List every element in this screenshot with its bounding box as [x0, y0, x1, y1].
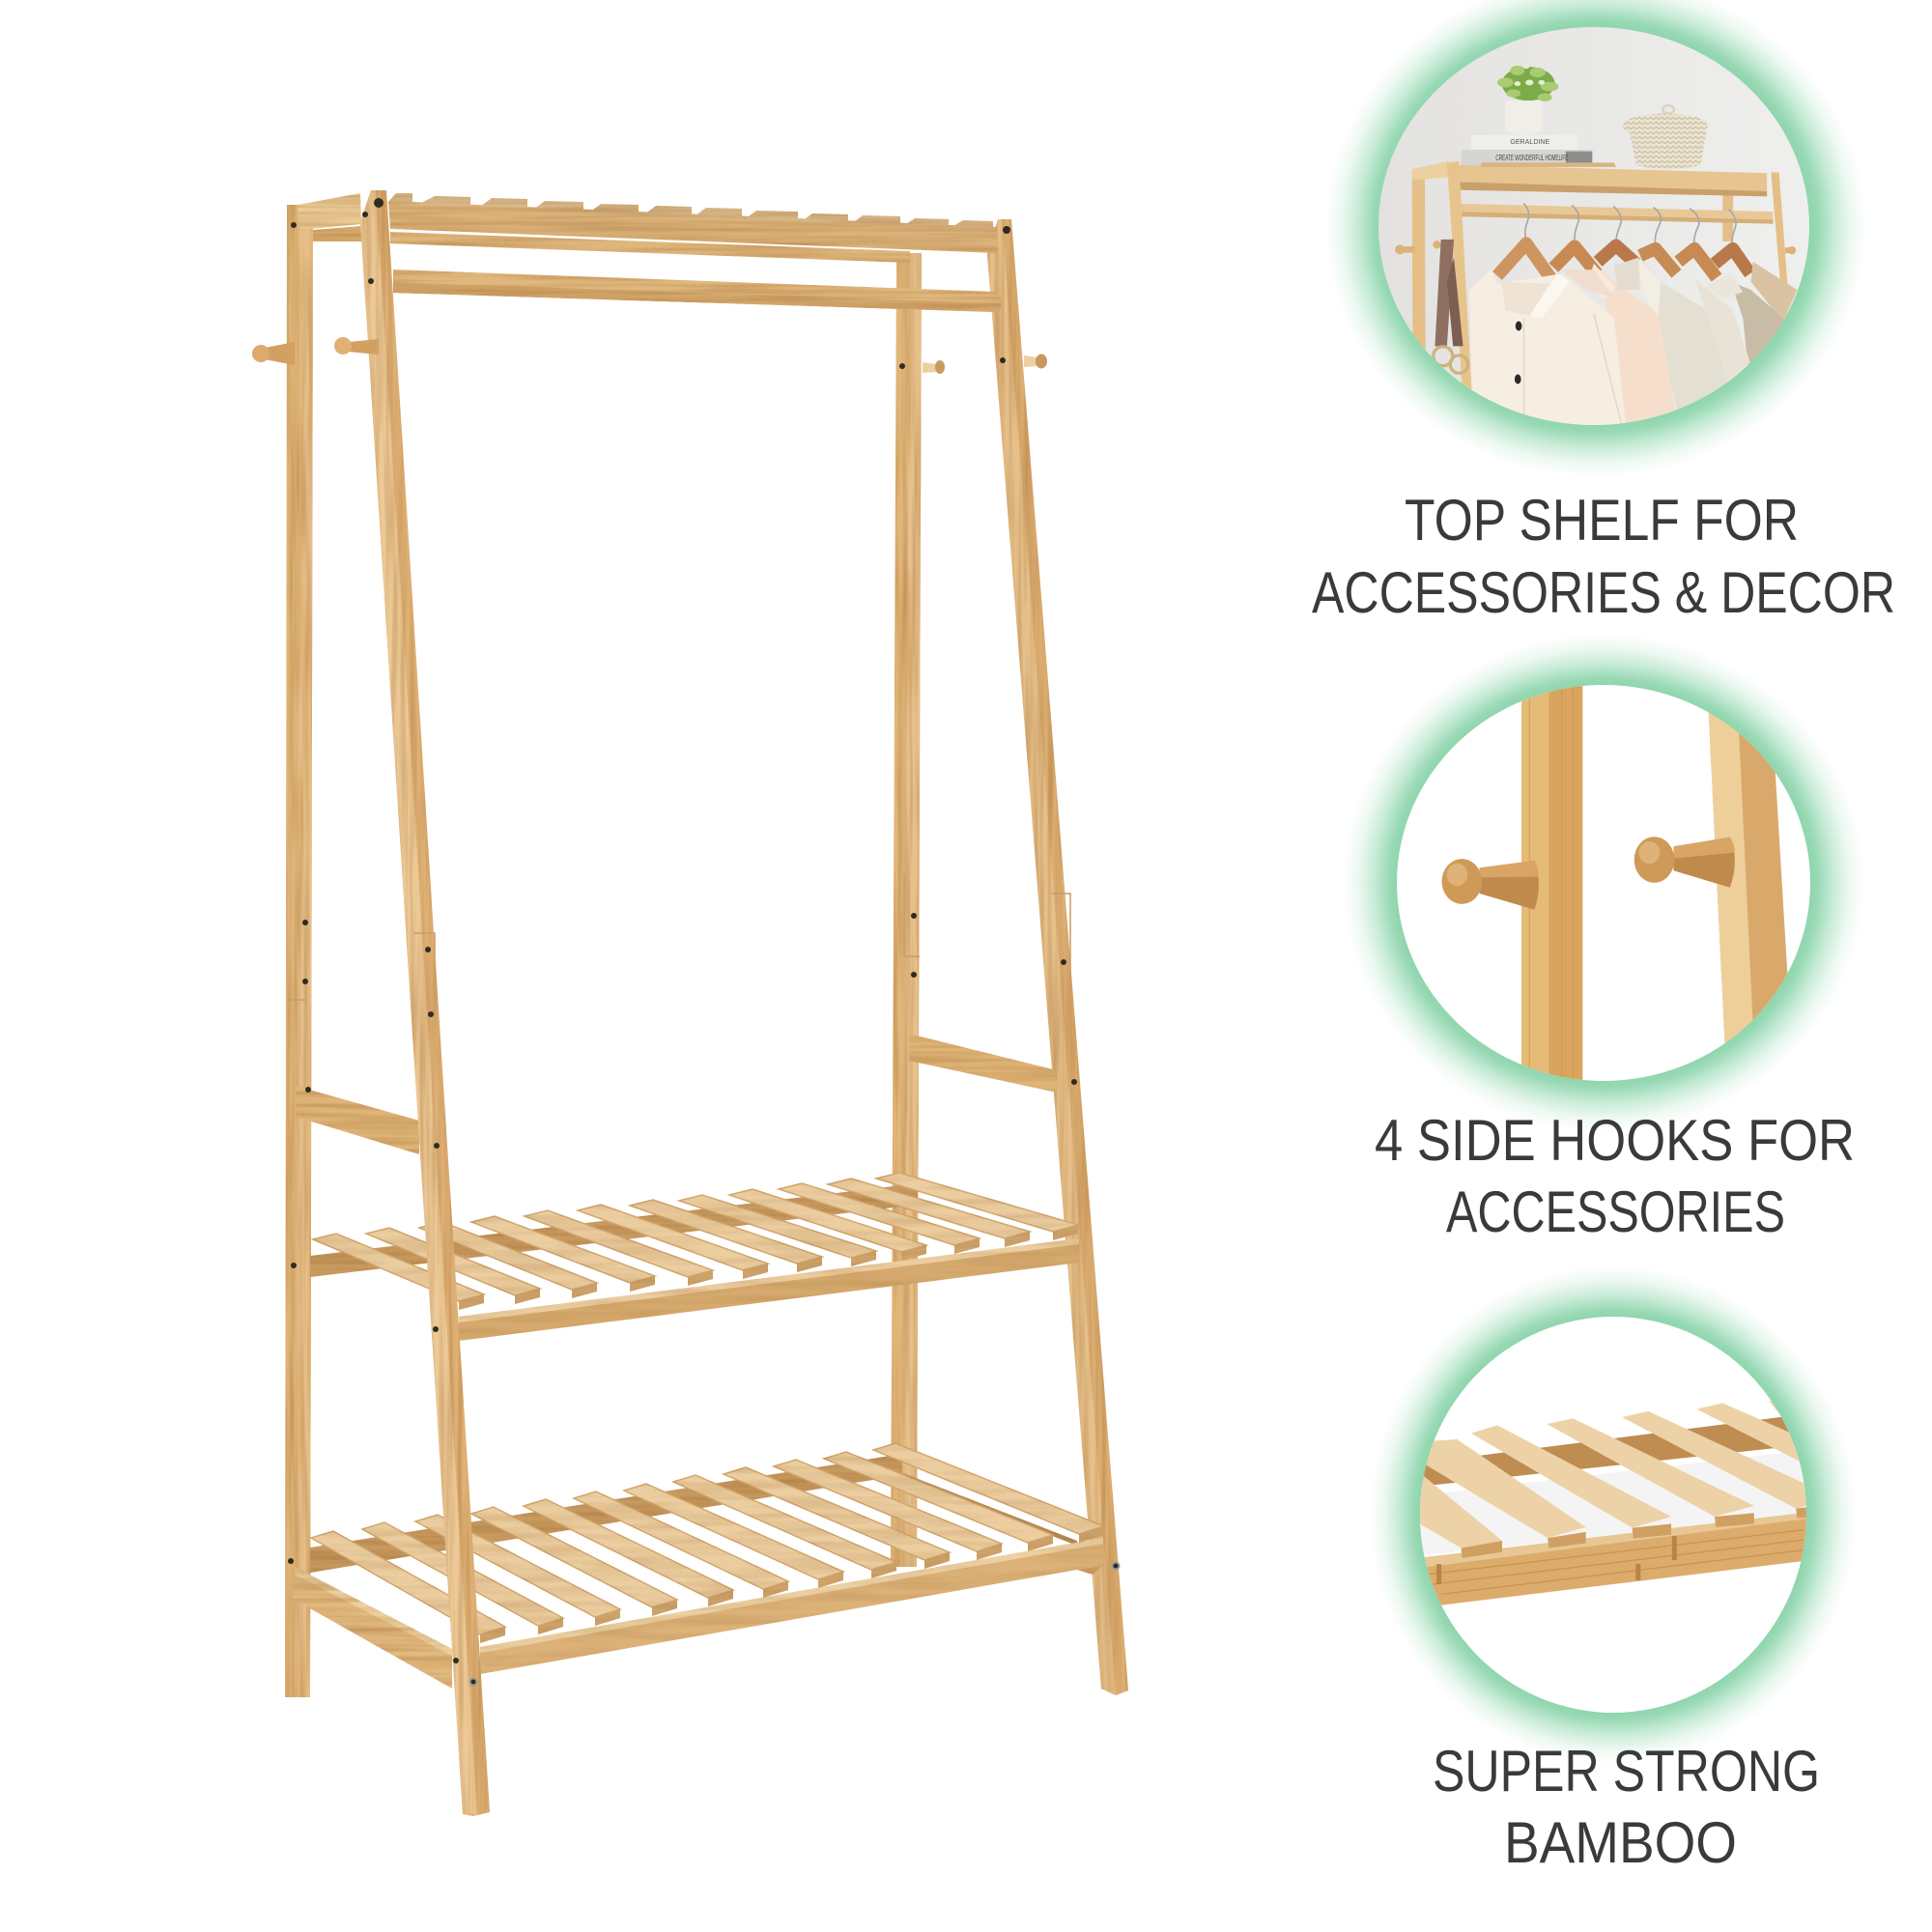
rear rail close up [1422, 1416, 1795, 1486]
green glow 3 [1370, 1265, 1857, 1764]
caption 3 [1433, 1739, 1820, 1875]
shelf in photo [1412, 161, 1767, 196]
bamboo garment rack product [252, 190, 1128, 1816]
caption 3: SUPER STRONG [1433, 1739, 1820, 1804]
feature: side hooks [1343, 634, 1864, 1244]
rear frame in photo [1412, 169, 1787, 350]
books [1462, 135, 1592, 166]
middle shelf front rail [459, 1238, 1079, 1341]
hook: front left [334, 337, 379, 355]
side pegs in photo [1395, 241, 1796, 254]
left post with hook [1442, 671, 1582, 1090]
photo circle: shelf with clothes [1372, 19, 1816, 435]
green glow 2 [1343, 634, 1864, 1132]
bottom shelf slat tops [311, 1443, 1104, 1634]
caption 2: 4 SIDE HOOKS FOR [1375, 1108, 1855, 1173]
caption 2 [1375, 1108, 1855, 1244]
green glow 1 [1325, 0, 1866, 477]
hook: rear right [923, 360, 945, 374]
feature: top shelf [1312, 0, 1895, 625]
hook: rear left [252, 342, 295, 365]
photo circle: slats close up [1420, 1317, 1806, 1713]
hangers [1497, 243, 1750, 278]
side braces and shelf rear rails [293, 1034, 1103, 1689]
slats close up [1420, 1401, 1806, 1548]
middle shelf [313, 1173, 1079, 1341]
screws [288, 198, 1119, 1685]
right post with hook [1634, 713, 1787, 1043]
side hooks [252, 337, 1047, 374]
right front leg [987, 219, 1128, 1695]
middle shelf slat tops [313, 1173, 1078, 1301]
leg splice joints [287, 874, 1070, 1014]
top shelf slat ends [388, 193, 993, 227]
bottom shelf [311, 1443, 1104, 1674]
feature: strong bamboo [1376, 1271, 1851, 1862]
top shelf [298, 193, 998, 263]
caption 2: ACCESSORIES [1446, 1179, 1785, 1244]
front post in photo [1447, 161, 1472, 403]
hook: front right [1024, 354, 1047, 369]
books: GERALDINE [1510, 138, 1550, 146]
middle shelf slat ends [459, 1225, 1078, 1310]
hanging rod [393, 270, 1002, 312]
rod and hanger hooks [1462, 203, 1773, 245]
shelf floor [1417, 1449, 1811, 1556]
rear frame posts [285, 205, 922, 1697]
caption 1: TOP SHELF FOR [1405, 488, 1799, 553]
rope basket [1623, 105, 1708, 169]
bottom shelf front rail [480, 1538, 1103, 1674]
hanging bag [1434, 240, 1468, 373]
books: CREATE WONDERFUL HOMELIFE [1495, 153, 1569, 162]
garments [1469, 258, 1797, 429]
caption 1 [1312, 488, 1895, 625]
left front leg [360, 190, 490, 1816]
front rail close up [1417, 1512, 1811, 1608]
caption 3: BAMBOO [1504, 1810, 1737, 1875]
bottom shelf slat ends [480, 1526, 1104, 1643]
plant [1497, 64, 1558, 135]
photo circle: hooks [1397, 685, 1810, 1081]
slat end grain [1462, 1507, 1811, 1558]
